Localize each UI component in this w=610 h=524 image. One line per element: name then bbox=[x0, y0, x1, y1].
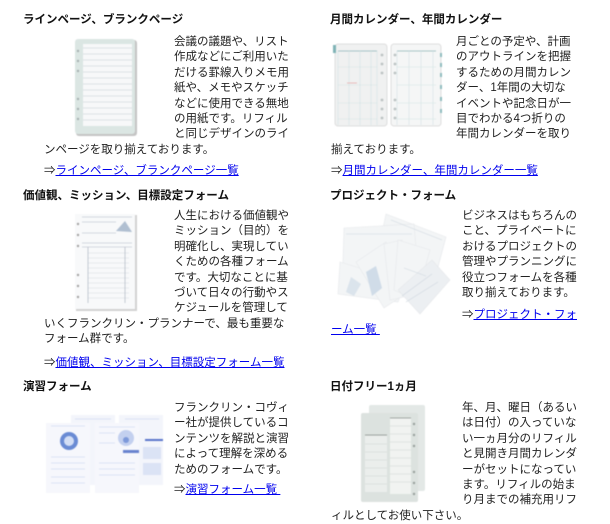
heading: 月間カレンダー、年間カレンダー bbox=[330, 14, 502, 26]
description text: づいて日々の行動やス bbox=[174, 287, 289, 299]
description text: 作成などにご利用いた bbox=[174, 51, 289, 63]
link: ⇒月間カレンダー、年間カレンダー一覧 bbox=[331, 165, 538, 177]
description text: ケジュールを管理して bbox=[174, 302, 288, 314]
description text: するための月間カレン bbox=[456, 67, 571, 79]
link: ⇒価値観、ミッション、目標設定フォーム一覧 bbox=[44, 357, 284, 369]
description text: ーがセットになってい bbox=[462, 464, 576, 476]
description text: おけるプロジェクトの bbox=[462, 241, 577, 253]
description text: ダー、1年間の大切な bbox=[456, 82, 566, 94]
description text: イベントや記念日が一 bbox=[456, 98, 571, 110]
description text: り月までの補充用リフ bbox=[462, 494, 577, 506]
description text: 管理やプランニングに bbox=[462, 256, 577, 268]
description text: 明確化し、実現してい bbox=[174, 241, 289, 253]
image: values form page bbox=[76, 214, 138, 312]
description text: ビジネスはもちろんの bbox=[462, 210, 577, 222]
link: ⇒ラインページ、ブランクページ一覧 bbox=[44, 165, 239, 177]
description text: こと、プライベートに bbox=[462, 225, 577, 237]
description text: だける罫線入りメモ用 bbox=[174, 67, 289, 79]
description text: の用紙です。リフィル bbox=[174, 113, 288, 125]
description text: 月ごとの予定や、計画 bbox=[456, 36, 571, 48]
description text: のアウトラインを把握 bbox=[456, 51, 571, 63]
description text: 役立つフォームを各種 bbox=[462, 272, 577, 284]
panel: values, mission and goal forms bbox=[23, 189, 289, 369]
description text: ィルとしてお使い下さい。 bbox=[331, 510, 468, 522]
description text: ためのフォームです。 bbox=[174, 464, 288, 476]
description text bbox=[462, 209, 577, 299]
description text: ー社が提供しているコ bbox=[174, 417, 289, 429]
description text: 年、月、曜日（あるい bbox=[462, 402, 577, 414]
heading: 日付フリー1ヵ月 bbox=[330, 381, 417, 393]
description text: ンページを取り揃えております。 bbox=[44, 144, 214, 156]
description text: です。大切なことに基 bbox=[174, 272, 288, 284]
description text: 取り揃えております。 bbox=[462, 287, 575, 299]
description text bbox=[44, 35, 289, 156]
image: scattered project forms bbox=[338, 214, 450, 314]
description text: と同じデザインのライ bbox=[174, 128, 289, 140]
panel: project forms bbox=[330, 189, 577, 336]
panel: line and blank pages bbox=[23, 12, 289, 177]
heading: 演習フォーム bbox=[23, 381, 92, 393]
image: calendar spread bbox=[332, 43, 443, 127]
description text: いくフランクリン・プランナーで、最も重要な bbox=[44, 318, 284, 330]
description text: と見開き月間カレンダ bbox=[462, 448, 577, 460]
description text: 目でわかる4つ折りの bbox=[456, 113, 566, 125]
panel: exercise forms bbox=[23, 380, 289, 496]
description text: 年間カレンダーを取り bbox=[456, 128, 571, 140]
link bbox=[331, 308, 577, 336]
description text: 紙や、メモやスケッチ bbox=[174, 82, 289, 94]
description text: 会議の議題や、リスト bbox=[174, 36, 289, 48]
description text: くための各種フォーム bbox=[174, 256, 289, 268]
link: ーム一覧 bbox=[331, 324, 377, 336]
description text bbox=[44, 209, 289, 345]
description text bbox=[174, 401, 289, 476]
description text: 人生における価値観や bbox=[174, 210, 289, 222]
description text: い一ヵ月分のリフィル bbox=[462, 433, 577, 445]
heading: プロジェクト・フォーム bbox=[330, 190, 456, 202]
image: undated month refill bbox=[360, 404, 426, 502]
description text: フランクリン・コヴィ bbox=[174, 402, 289, 414]
description text: フォーム群です。 bbox=[44, 333, 135, 345]
description text: ミッション（目的）を bbox=[174, 225, 289, 237]
description text bbox=[331, 401, 577, 522]
link: ⇒演習フォーム一覧 bbox=[174, 484, 277, 496]
description text bbox=[331, 35, 571, 156]
link: ⇒プロジェクト・フォ bbox=[462, 309, 577, 321]
description text: ンテンツを解説と演習 bbox=[174, 433, 289, 445]
heading: 価値観、ミッション、目標設定フォーム bbox=[23, 190, 229, 202]
image: lined refill page bbox=[74, 38, 138, 136]
panel: monthly and yearly calendars bbox=[330, 12, 571, 177]
description text: などに使用できる無地 bbox=[174, 98, 289, 110]
description text: ます。リフィルの始ま bbox=[462, 479, 576, 491]
description text: によって理解を深める bbox=[174, 448, 288, 460]
image: exercise form sheets bbox=[46, 416, 164, 492]
heading: ラインページ、ブランクページ bbox=[23, 14, 183, 26]
panel: undated one-month refill bbox=[330, 380, 577, 522]
description text: は日付）の入っていな bbox=[462, 417, 576, 429]
description text: 揃えております。 bbox=[331, 144, 421, 156]
